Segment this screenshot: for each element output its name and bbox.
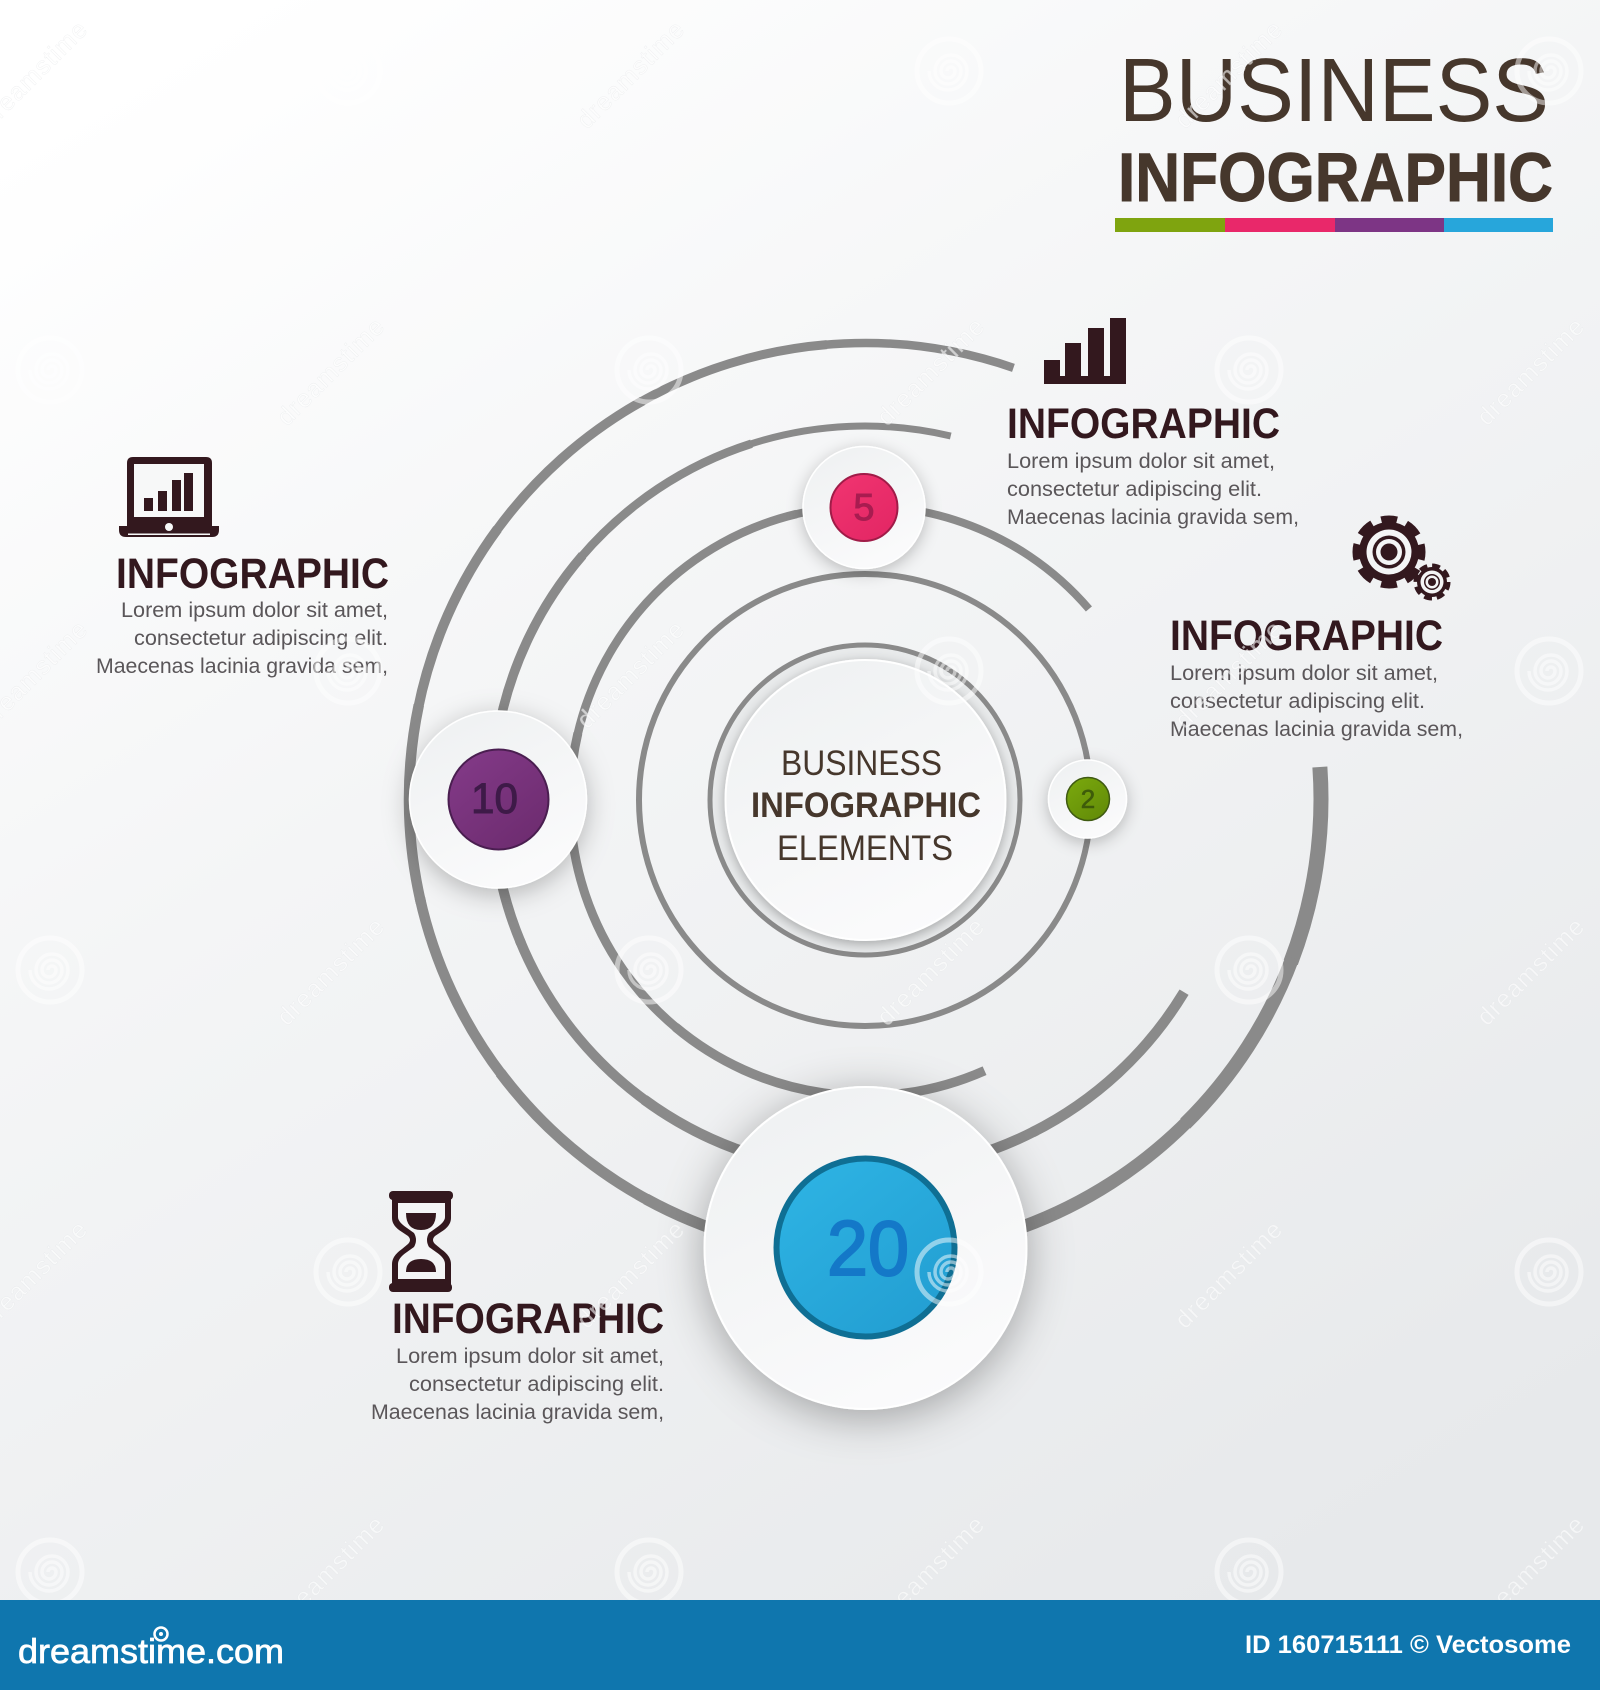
second tapered ring xyxy=(339,273,1391,1325)
panel: bottom label: consectetur adipiscing elit. xyxy=(409,1373,664,1396)
footer logo: dreamstime.com xyxy=(18,1633,284,1671)
watermark text: dreamstime xyxy=(871,912,991,1031)
panel: left label: Lorem ipsum dolor sit amet, xyxy=(121,599,388,622)
panel: right label: Maecenas lacinia gravida sem, xyxy=(1170,718,1463,741)
watermark text: dreamstime xyxy=(1169,615,1289,734)
watermark text: dreamstime xyxy=(1471,312,1591,431)
node: 5: 5 xyxy=(853,487,875,529)
node: 2: 2 xyxy=(1081,784,1095,814)
third tapered ring xyxy=(450,386,1280,1216)
node: 2 xyxy=(1048,760,1126,838)
panel: bottom label: Lorem ipsum dolor sit amet, xyxy=(396,1345,664,1368)
icon: laptop xyxy=(119,457,219,537)
watermark text: dreamstime xyxy=(1471,912,1591,1031)
watermark text: dreamstime xyxy=(871,312,991,431)
panel: top right label: Maecenas lacinia gravida sem, xyxy=(1007,506,1299,529)
watermark text: dreamstime xyxy=(271,1510,391,1629)
panel: right label: Lorem ipsum dolor sit amet, xyxy=(1170,662,1438,685)
centre label: BUSINESS xyxy=(781,744,942,783)
centre label: INFOGRAPHIC xyxy=(751,786,981,825)
watermark text: dreamstime xyxy=(1169,1215,1289,1334)
panel: left label: Maecenas lacinia gravida sem, xyxy=(96,655,388,678)
panel: bottom label: INFOGRAPHIC xyxy=(392,1295,664,1343)
node: 5 xyxy=(803,446,925,568)
panel: right label: consectetur adipiscing elit. xyxy=(1170,690,1425,713)
footer credit: ID 160715111 © Vectosome xyxy=(1245,1631,1571,1659)
watermark text: dreamstime xyxy=(271,312,391,431)
concentric ring arcs xyxy=(220,154,1510,1444)
watermark text: dreamstime xyxy=(871,1510,991,1629)
node: 10 xyxy=(410,711,586,888)
outer tapered ring xyxy=(220,154,1510,1444)
icon: bar chart xyxy=(1044,318,1126,384)
panel: top right label xyxy=(1007,318,1299,529)
panel: right label: INFOGRAPHIC xyxy=(1170,612,1443,660)
icon: gears xyxy=(1356,519,1448,598)
footer bar xyxy=(0,1600,1600,1690)
watermark text: dreamstime xyxy=(1169,15,1289,134)
panel: top right label: Lorem ipsum dolor sit amet, xyxy=(1007,450,1275,473)
panel: left label xyxy=(96,457,389,678)
panel: right label xyxy=(1170,519,1463,741)
centre label: ELEMENTS xyxy=(777,829,953,868)
icon: hourglass xyxy=(389,1191,453,1292)
node: 10: 10 xyxy=(471,775,518,823)
title: INFOGRAPHIC xyxy=(1118,139,1553,216)
panel: left label: consectetur adipiscing elit. xyxy=(134,627,388,650)
watermark text: dreamstime xyxy=(571,1215,691,1334)
title colour bar xyxy=(1115,218,1553,232)
watermark text: dreamstime xyxy=(271,912,391,1031)
panel: bottom label: Maecenas lacinia gravida sem, xyxy=(371,1401,664,1424)
panel: left label: INFOGRAPHIC xyxy=(116,550,389,598)
watermark text: dreamstime xyxy=(571,15,691,134)
centre label xyxy=(751,744,981,868)
title xyxy=(1118,41,1553,216)
node: 20 xyxy=(704,1087,1026,1409)
title: BUSINESS xyxy=(1119,41,1549,141)
panel: top right label: consectetur adipiscing elit. xyxy=(1007,478,1262,501)
panel: bottom label xyxy=(371,1191,664,1424)
watermark text: dreamstime xyxy=(1471,1510,1591,1629)
node: 20: 20 xyxy=(827,1204,909,1292)
panel: top right label: INFOGRAPHIC xyxy=(1007,400,1280,448)
centre circle xyxy=(710,645,1020,955)
watermark text: dreamstime xyxy=(571,615,691,734)
